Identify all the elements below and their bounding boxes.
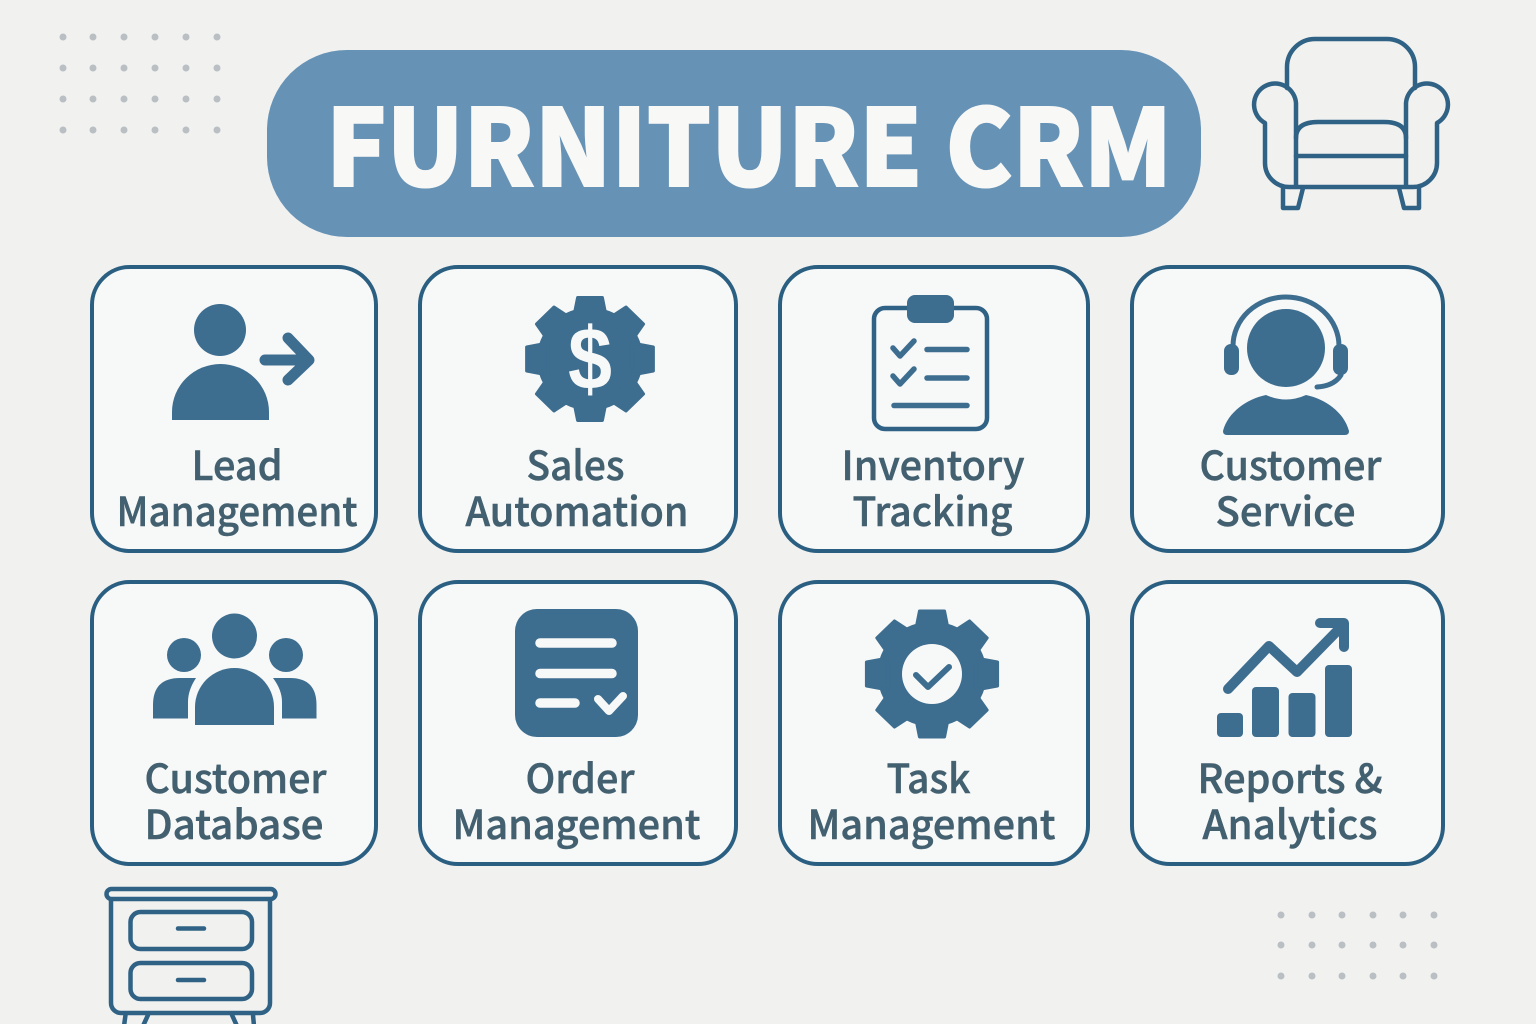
label: Management — [452, 793, 701, 851]
panel: Sales Automation — [420, 267, 736, 551]
label: Tracking — [852, 480, 1012, 538]
label: Database — [144, 793, 324, 851]
label: Reports & — [1198, 747, 1382, 805]
icon: gear with dollar sign — [527, 298, 653, 420]
icon: gear with dollar sign: $ — [568, 309, 612, 408]
label: Order — [526, 747, 635, 805]
icon: bar chart with trend arrow — [1217, 623, 1352, 737]
panel: Task Management — [780, 582, 1088, 864]
panel: Customer Service — [1132, 267, 1443, 551]
decorative dot grid: bottom right — [1278, 912, 1438, 980]
label: Sales — [526, 434, 624, 492]
icon: clipboard checklist — [874, 295, 987, 429]
label: Service — [1216, 480, 1356, 538]
icon: nightstand — [106, 889, 276, 1024]
label: Task — [886, 747, 970, 805]
label: Lead — [192, 434, 282, 492]
label: Customer — [144, 747, 327, 805]
label: Customer — [1200, 434, 1382, 492]
label: Analytics — [1202, 793, 1378, 851]
icon: headset agent — [1223, 297, 1349, 435]
label: Automation — [466, 480, 688, 538]
label: Management — [808, 793, 1056, 851]
icon: armchair — [1254, 39, 1448, 208]
panel: Reports & Analytics — [1132, 582, 1443, 864]
panel: Lead Management — [92, 267, 376, 551]
icon: order document with check — [515, 609, 638, 737]
label: Inventory — [842, 434, 1025, 492]
icon: group of people — [153, 614, 316, 725]
panel: Inventory Tracking — [780, 267, 1088, 551]
title text: FURNITURE CRM — [326, 63, 1172, 217]
icon: lead person with arrow — [172, 304, 309, 420]
decorative dot grid: top left — [60, 34, 220, 134]
panel: Order Management — [420, 582, 736, 864]
title banner — [267, 50, 1201, 237]
label: Management — [116, 480, 358, 538]
icon: gear with check — [866, 611, 998, 737]
panel: Customer Database — [92, 582, 376, 864]
